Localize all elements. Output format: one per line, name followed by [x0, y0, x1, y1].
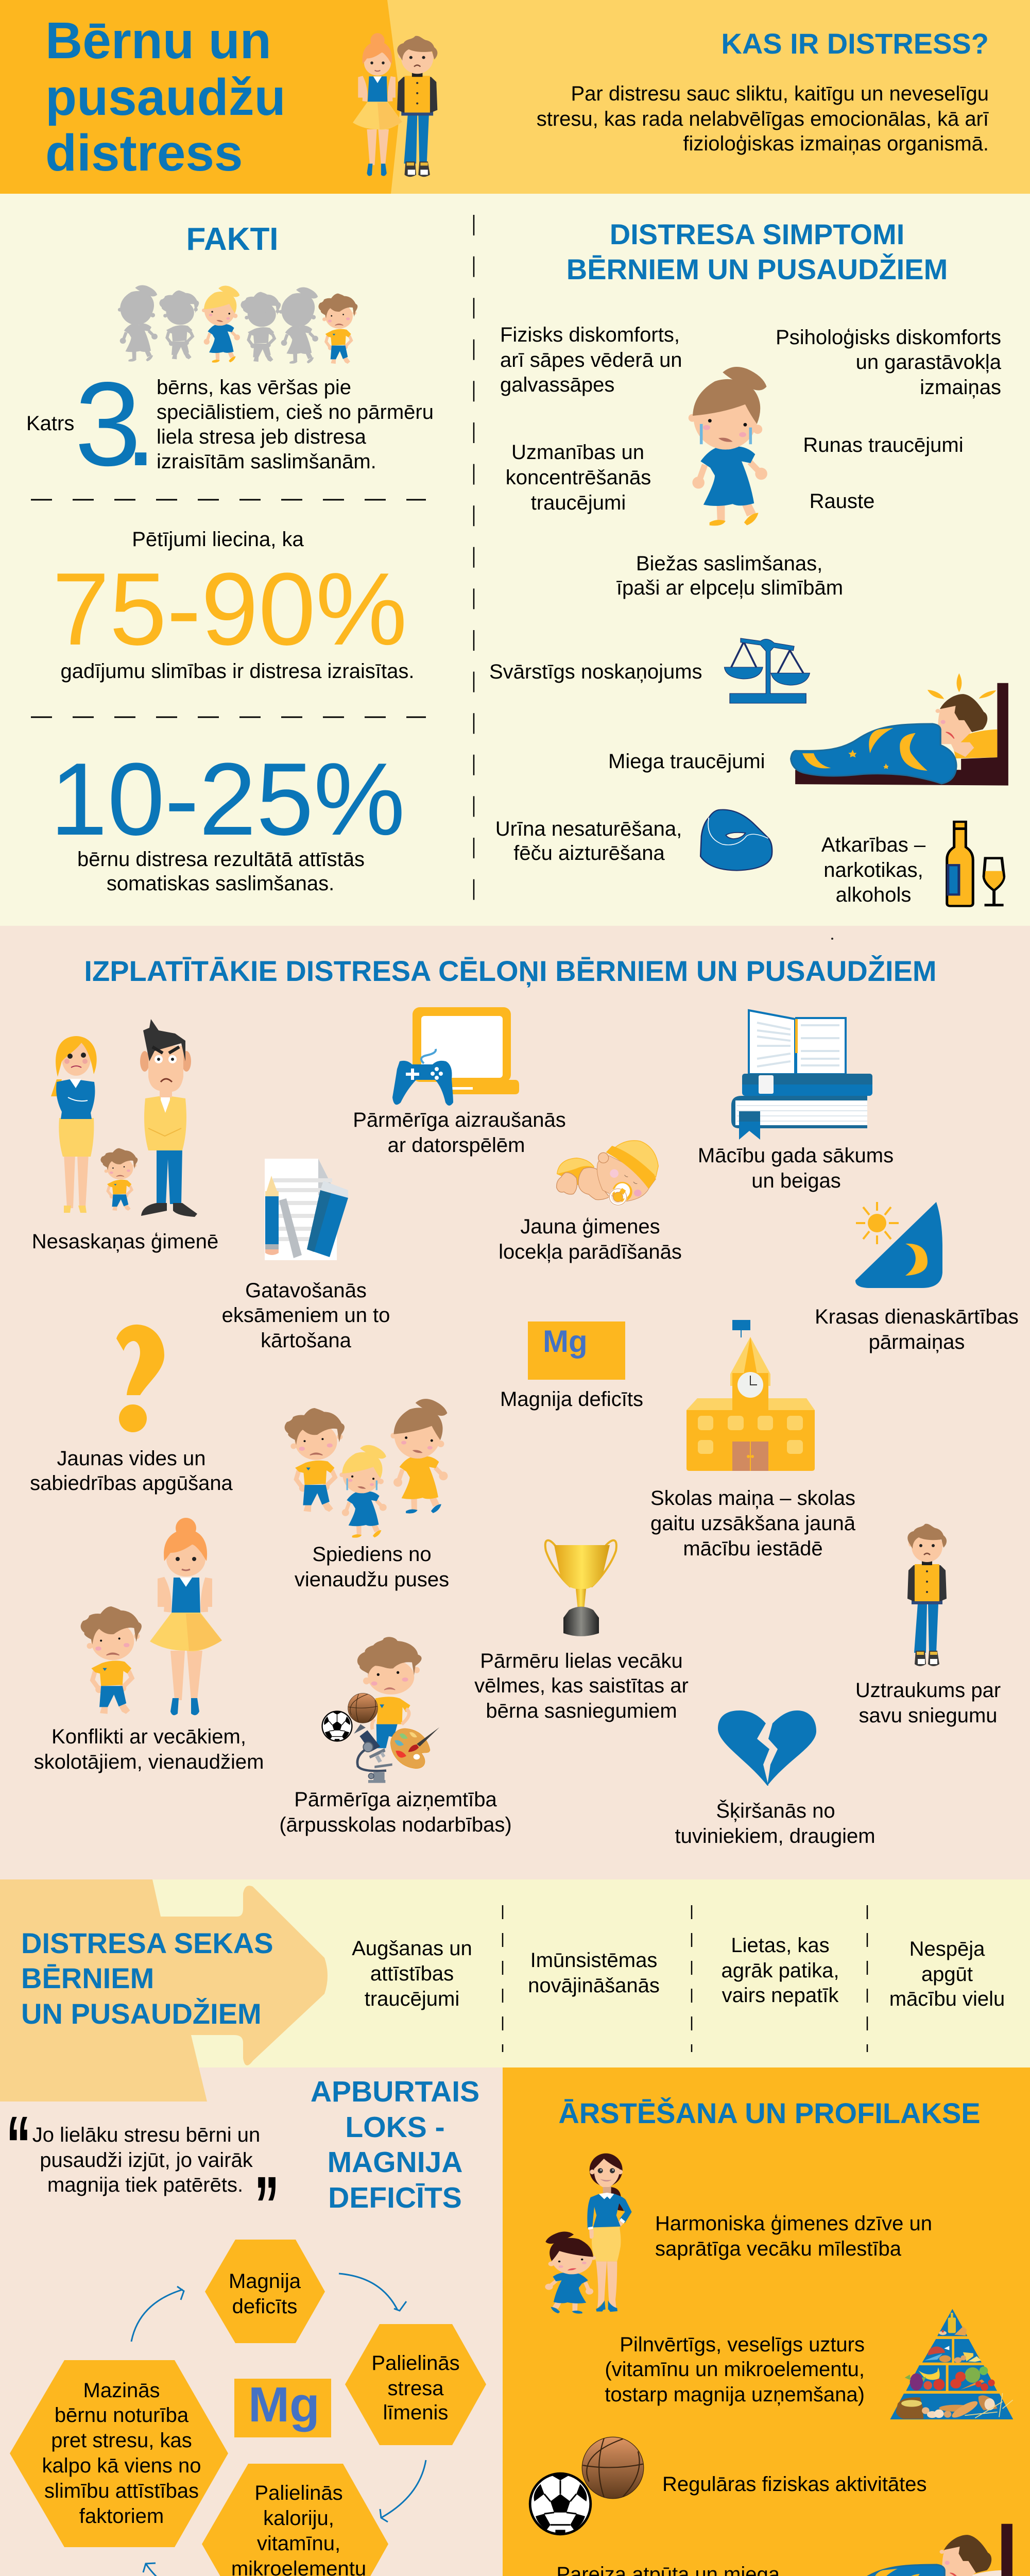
icon: bottle and glass: [947, 822, 1004, 906]
symptom labels: Biežas saslimšanas,: [636, 552, 822, 575]
icon: crying girl: [689, 367, 767, 526]
hexagon: reduced resilience: pret stresu, kas: [51, 2429, 192, 2452]
stat: 75-90%: Pētījumi liecina, ka: [132, 528, 304, 551]
heading: consequences: DISTRESA SEKAS: [21, 1927, 273, 1959]
heading: causes: IZPLATĪTĀKIE DISTRESA CĒLOŅI BĒRNIEM UN PUSAUDŽIEM: [84, 955, 937, 988]
stat: 10-25%: somatiskas saslimšanas.: [107, 872, 334, 895]
icon: Mg square: [528, 1321, 625, 1380]
cause: separation: [675, 1710, 876, 1848]
symptom labels: Atkarības –: [821, 834, 926, 856]
label: bērna sasniegumiem: [486, 1700, 677, 1722]
text block: distress definition: fizioloģiskas izmaiņas organismā.: [683, 132, 989, 155]
icon: Mg center square: Mg: [248, 2377, 320, 2432]
icon: broken heart: [718, 1710, 816, 1786]
label: Pārmēru lielas vecāku: [480, 1650, 683, 1672]
heading: vicious circle: MAGNIJA: [328, 2146, 462, 2179]
icon: sun and moon: [855, 1202, 942, 1288]
hexagon: reduced resilience: bērnu noturība: [55, 2404, 189, 2427]
panel: magnesium background: [0, 2067, 503, 2576]
heading: vicious circle: DEFICĪTS: [328, 2181, 462, 2214]
hexagon: reduced resilience: kalpo kā viens no: [42, 2454, 201, 2477]
cause: parent expectations: [474, 1540, 689, 1722]
cause: magnesium deficit: [500, 1321, 643, 1411]
quote: magnesium consumption: ”: [254, 2160, 279, 2251]
icon: laptop and gamepad: [392, 1007, 519, 1106]
symptom labels: narkotikas,: [823, 859, 923, 882]
icon: sleeping child with rays: [791, 673, 1008, 786]
icon: sleeping baby: [557, 1141, 658, 1205]
cause: exams: [222, 1159, 390, 1352]
icon: soccer ball: [530, 2473, 591, 2534]
symptom labels: izmaiņas: [920, 376, 1001, 399]
icon: daughter: [545, 2232, 596, 2314]
heading: consequences: UN PUSAUDŽIEM: [21, 1997, 262, 2030]
label: ar datorspēlēm: [388, 1134, 525, 1157]
stat: one in three: Katrs: [26, 412, 74, 435]
panel: header background: [0, 0, 1030, 194]
heading: what is distress: KAS IR DISTRESS?: [721, 27, 989, 60]
icon: boy with hobbies: [322, 1637, 439, 1783]
treatment: nutrition: [605, 2309, 1013, 2420]
icon: potty: [700, 810, 772, 871]
stat: one in three: bērns, kas vēršas pie: [157, 376, 351, 399]
label: Nesaskaņas ģimenē: [32, 1230, 218, 1253]
cause: new environment: [30, 1325, 233, 1495]
icon: Mg square: Mg: [543, 1324, 588, 1359]
label: sabiedrības apgūšana: [30, 1472, 233, 1495]
cause: performance worry: [855, 1524, 1001, 1727]
arrow: consequences: [0, 1879, 328, 2102]
label: pārmaiņas: [869, 1331, 965, 1353]
label: vienaudžu puses: [295, 1568, 449, 1591]
consequence items: mācību vielu: [889, 1988, 1005, 2010]
label: Harmoniska ģimenes dzīve un: [655, 2212, 932, 2235]
panel: treatment background: [503, 2067, 1030, 2576]
symptom labels: galvassāpes: [500, 374, 614, 396]
cause: peer pressure: [285, 1399, 449, 1591]
icon: Mg center square: [234, 2377, 331, 2437]
hexagon: magnesium deficit: [205, 2240, 325, 2343]
symptom labels: Uzmanības un: [511, 441, 644, 464]
cause: overload: [279, 1637, 512, 1836]
title: Bērnu un: [45, 12, 271, 70]
text block: distress definition: stresu, kas rada nelabvēlīgas emocionālas, kā arī: [537, 108, 989, 130]
title: pusaudžu: [45, 69, 286, 126]
heading: consequences: BĒRNIEM: [21, 1962, 154, 1994]
symptom labels: traucējumi: [531, 492, 626, 514]
label: Jaunas vides un: [57, 1447, 206, 1470]
treatment: nutrition: tostarp magnija uzņemšana): [605, 2383, 865, 2406]
label: Jauna ģimenes: [520, 1215, 660, 1238]
label: kārtošana: [261, 1329, 352, 1352]
label: Konflikti ar vecākiem,: [52, 1725, 246, 1748]
label: skolotājiem, vienaudžiem: [34, 1751, 264, 1773]
label: Skolas maiņa – skolas: [650, 1487, 855, 1510]
label: Gatavošanās: [245, 1279, 367, 1302]
icon: mother: [587, 2154, 632, 2312]
consequence items: apgūt: [921, 1963, 973, 1986]
cause: family discord: [32, 1019, 218, 1253]
treatment: family: [545, 2154, 932, 2314]
consequence items: agrāk patika,: [721, 1959, 839, 1982]
diagram: vicious circle hexagons: [10, 2240, 486, 2576]
hexagon: consumption increases: [202, 2464, 388, 2576]
symptom labels: Fizisks diskomforts,: [500, 324, 680, 346]
label: Spiediens no: [312, 1543, 432, 1566]
panel: consequences background: [0, 1879, 1030, 2067]
label: Krasas dienaskārtības: [815, 1306, 1019, 1328]
heading: vicious circle: APBURTAIS: [311, 2075, 479, 2108]
icon: paper, pencil, ruler: [265, 1159, 348, 1260]
stat: one in three: 3: [75, 358, 141, 491]
symptom labels: arī sāpes vēderā un: [500, 349, 682, 371]
icon: sleeping child: [795, 2524, 1012, 2576]
hexagon: stress level: stresa: [388, 2377, 444, 2400]
label: Pārmērīga aizņemtība: [294, 1788, 497, 1811]
panel: causes background: [0, 926, 1030, 1879]
quote: magnesium consumption: “: [6, 2099, 31, 2191]
icon: food pyramid: [890, 2309, 1013, 2420]
stat: one in three: izraisītām saslimšanām.: [157, 450, 376, 473]
icon: trophy: [545, 1540, 616, 1636]
cause: new family member: [499, 1141, 682, 1263]
stat: one in three: [26, 358, 434, 491]
label: savu sniegumu: [859, 1704, 998, 1727]
icon: basketball: [582, 2437, 644, 2499]
text block: distress definition: Par distresu sauc sliktu, kaitīgu un neveselīgu: [571, 82, 989, 105]
stat: one in three: .: [124, 358, 157, 491]
label: saprātīga vecāku mīlestība: [655, 2238, 902, 2260]
treatment: nutrition: Pilnvērtīgs, veselīgs uzturs: [620, 2333, 865, 2356]
title: distress: [45, 124, 243, 182]
hexagon: stress level: līmenis: [383, 2401, 448, 2424]
symptom labels: Urīna nesaturēšana,: [495, 818, 682, 840]
hexagon: reduced resilience: faktoriem: [79, 2505, 164, 2528]
icon: header boy: [397, 36, 437, 177]
symptom labels: Miega traucējumi: [608, 750, 765, 773]
label: gaitu uzsākšana jaunā: [650, 1512, 856, 1535]
icon: books: [731, 1010, 872, 1140]
cause: school change: [650, 1320, 856, 1560]
label: eksāmeniem un to: [222, 1304, 390, 1327]
hexagon: reduced resilience: Mazinās: [83, 2379, 160, 2402]
label: vēlmes, kas saistītas ar: [474, 1674, 689, 1697]
heading: symptoms: BĒRNIEM UN PUSAUDŽIEM: [566, 253, 948, 285]
label: Mācību gada sākums: [698, 1144, 894, 1167]
hexagon: stress level: [345, 2324, 486, 2445]
symptom labels: Rauste: [810, 490, 874, 513]
symptom labels: Runas traucējumi: [803, 434, 964, 456]
cause: school year: [698, 1010, 894, 1192]
consequence items: novājināšanās: [528, 1974, 660, 1997]
icon: scales: [725, 638, 810, 703]
stat: 10-25%: 10-25%: [50, 742, 405, 857]
icon: woman with crossed arms: [51, 1036, 97, 1213]
icon: angry man: [140, 1019, 197, 1217]
symptom labels: Psiholoģisks diskomforts: [776, 326, 1001, 349]
icon: boy: [81, 1606, 142, 1714]
hexagon: consumption increases: Palielinās: [254, 2482, 343, 2504]
icon: worried boy: [907, 1524, 947, 1666]
label: Magnija deficīts: [500, 1388, 643, 1411]
symptom labels: [489, 324, 1002, 906]
hexagon: magnesium deficit: Magnija: [229, 2270, 301, 2293]
icon: redhead woman: [150, 1518, 222, 1715]
hexagon: reduced resilience: slimību attīstības: [44, 2480, 199, 2502]
stat: one in three: liela stresa jeb distresa: [157, 426, 367, 448]
symptom labels: īpaši ar elpceļu slimībām: [616, 577, 843, 599]
label: tuviniekiem, draugiem: [675, 1825, 876, 1848]
consequence items: traucējumi: [365, 1988, 459, 2010]
icon: header girl: [353, 33, 402, 176]
label: locekļa parādīšanās: [499, 1241, 682, 1263]
hexagon: reduced resilience: [10, 2360, 228, 2547]
stat: 10-25%: bērnu distresa rezultātā attīstās: [77, 848, 365, 871]
label: (ārpusskolas nodarbības): [279, 1814, 512, 1836]
stat: one in three: speciālistiem, cieš no pārmēru: [157, 401, 434, 423]
hexagon: magnesium deficit: deficīts: [232, 2295, 297, 2318]
symptom labels: un garastāvokļa: [856, 351, 1002, 374]
quote: magnesium consumption: [6, 2099, 279, 2251]
consequence items: [352, 1934, 1005, 2010]
heading: symptoms: DISTRESA SIMPTOMI: [610, 218, 904, 250]
cause: daily routine changes: [815, 1202, 1019, 1353]
consequence items: vairs nepatīk: [722, 1984, 839, 2007]
arrows: cycle: [131, 2274, 426, 2576]
stat: 75-90%: gadījumu slimības ir distresa izraisītas.: [61, 660, 414, 683]
consequence items: Lietas, kas: [731, 1934, 830, 1957]
symptom labels: alkohols: [836, 884, 911, 906]
hexagon: consumption increases: kaloriju,: [263, 2507, 334, 2530]
consequence items: Augšanas un: [352, 1937, 472, 1960]
label: Regulāras fiziskas aktivitātes: [662, 2473, 927, 2496]
heading: vicious circle: LOKS -: [345, 2111, 445, 2144]
icon: three kids: [285, 1399, 448, 1538]
treatment: sports: [530, 2437, 927, 2534]
label: un beigas: [751, 1170, 841, 1192]
heading: treatment: ĀRSTĒŠANA UN PROFILAKSE: [558, 2097, 981, 2129]
symptom labels: koncentrēšanās: [506, 466, 651, 489]
cause: computer games: [353, 1007, 566, 1157]
hexagon: stress level: Palielinās: [371, 2352, 460, 2375]
consequence items: Nespēja: [909, 1938, 985, 1960]
heading: facts: FAKTI: [186, 222, 279, 257]
icon: row of six children: [118, 285, 357, 364]
label: Pārmērīga aizraušanās: [353, 1109, 566, 1131]
icon: small boy: [100, 1148, 138, 1211]
icon: school building: [686, 1320, 815, 1471]
symptom labels: fēču aizturēšana: [513, 842, 665, 865]
label: Šķiršanās no: [716, 1799, 835, 1822]
stat: 75-90%: 75-90%: [52, 552, 407, 667]
cause: conflicts: [34, 1518, 264, 1773]
treatment: nutrition: (vitamīnu un mikroelementu,: [605, 2358, 865, 2381]
consequence items: Imūnsistēmas: [530, 1949, 657, 1972]
consequence items: attīstības: [370, 1962, 454, 1985]
hexagon: consumption increases: vitamīnu,: [257, 2532, 340, 2555]
symptom labels: Svārstīgs noskaņojums: [489, 660, 702, 683]
icon: question mark: [116, 1325, 164, 1432]
treatment: sleep: [556, 2524, 1012, 2576]
quote: magnesium consumption: pusaudži izjūt, jo vairāk: [40, 2149, 253, 2172]
quote: magnesium consumption: Jo lielāku stresu bērni un: [32, 2124, 260, 2146]
quote: magnesium consumption: magnija tiek patērēts.: [47, 2174, 243, 2196]
label: Uztraukums par: [855, 1679, 1001, 1702]
label: mācību iestādē: [683, 1537, 823, 1560]
panel: facts and symptoms background: [0, 194, 1030, 926]
